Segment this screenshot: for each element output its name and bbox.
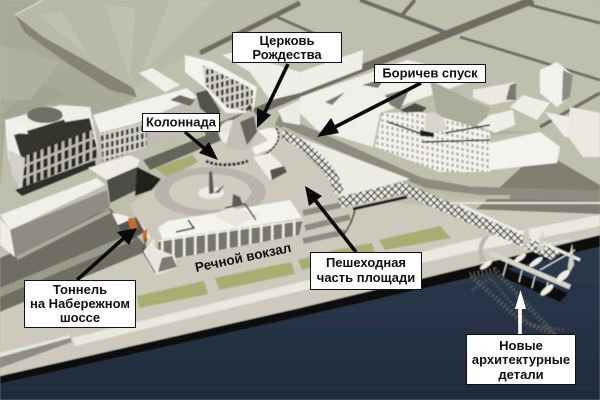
new architectural details xyxy=(460,205,580,335)
grey pedestrian stripes xyxy=(303,203,350,241)
hill at top left xyxy=(0,0,300,190)
label: Тоннель на Набережном шоссе: на Набережном xyxy=(30,296,130,311)
arrow: Новые архитектурные детали xyxy=(515,290,526,334)
pedestrian bridge truss xyxy=(281,130,562,260)
right white buildings xyxy=(300,60,600,172)
plaza ground xyxy=(0,130,600,376)
arrow: Церковь Рождества xyxy=(257,64,288,128)
label: Тоннель на Набережном шоссе: Тоннель xyxy=(53,282,107,297)
glass pavilion xyxy=(88,155,161,203)
colonnade xyxy=(206,161,248,165)
arrow: Боричев спуск xyxy=(317,83,421,137)
tunnel portal xyxy=(112,213,151,243)
left ornate building xyxy=(5,105,100,196)
circular square xyxy=(154,167,266,217)
long white building left xyxy=(0,178,110,257)
right side road bands xyxy=(277,120,600,215)
left road xyxy=(0,208,150,312)
label: Церковь Рождества xyxy=(232,32,342,62)
label: Тоннель на Набережном шоссе xyxy=(24,280,136,328)
street grid xyxy=(200,0,600,133)
water xyxy=(0,247,600,400)
white walkway xyxy=(72,215,600,346)
white ground beside bridge xyxy=(280,130,410,198)
label: Новые архитектурные детали: детали xyxy=(498,367,544,382)
riverside row buildings xyxy=(93,68,222,170)
arrow: Колоннада xyxy=(185,132,218,160)
label: Новые архитектурные детали xyxy=(466,334,576,384)
label: Боричев спуск: Боричев спуск xyxy=(382,66,478,80)
river station building xyxy=(143,194,303,275)
arrow: Тоннель xyxy=(77,228,137,280)
label: Речной вокзал: Речной вокзал xyxy=(194,240,293,275)
quay wall xyxy=(0,235,600,384)
label: Церковь Рождества: Рождества xyxy=(252,47,322,62)
label: Церковь Рождества: Церковь xyxy=(259,33,315,48)
label: Новые архитектурные детали: архитектурные xyxy=(472,352,570,367)
arrow: Пешеходная часть площади xyxy=(305,186,356,252)
label: Пешеходная часть площади: часть площади xyxy=(317,270,415,285)
green lawns xyxy=(137,155,451,308)
label: Пешеходная часть площади xyxy=(310,252,422,290)
church building group xyxy=(185,50,363,180)
label: Тоннель на Набережном шоссе: шоссе xyxy=(60,310,100,325)
label: Колоннада: Колоннада xyxy=(146,114,217,130)
label: Пешеходная часть площади: Пешеходная xyxy=(326,255,406,270)
label: Новые архитектурные детали: Новые xyxy=(499,338,543,353)
